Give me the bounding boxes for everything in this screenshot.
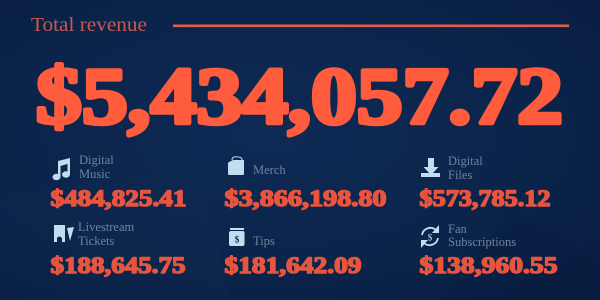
panel: tips — [224, 228, 362, 278]
label: fan subscriptions: Subscriptions — [448, 235, 516, 249]
label: digital files: Files — [448, 168, 472, 182]
icon: tip jar: $ — [235, 234, 240, 244]
value: merch: $3,866,198.80 — [224, 186, 386, 211]
value: fan subscriptions: $138,960.55 — [420, 253, 558, 278]
label: digital files: Digital — [448, 154, 483, 168]
icon: shopping bag — [228, 157, 244, 175]
label: fan subscriptions: Fan — [448, 222, 467, 236]
icon: tickets — [54, 225, 74, 242]
value: digital music: $484,825.41 — [50, 186, 186, 211]
panel: livestream tickets — [50, 220, 186, 278]
heading rule — [173, 24, 569, 27]
panel: fan subscriptions — [420, 222, 558, 278]
icon: circular arrows with dollar: $ — [428, 232, 433, 242]
label: livestream tickets: Livestream — [78, 220, 134, 234]
value: digital files: $573,785.12 — [420, 186, 550, 211]
label: digital music: Digital — [79, 153, 114, 167]
value: tips: $181,642.09 — [224, 253, 362, 278]
panel: merch — [224, 157, 386, 211]
icon: music notes — [53, 158, 70, 180]
heading: total revenue: Total revenue — [31, 14, 147, 36]
total amount: $5,434,057.72 — [36, 53, 563, 141]
panel: digital files — [420, 154, 550, 211]
label: digital music: Music — [79, 167, 111, 181]
panel: digital music — [50, 153, 186, 211]
value: livestream tickets: $188,645.75 — [50, 253, 186, 278]
label: tips: Tips — [253, 234, 275, 248]
label: merch: Merch — [253, 163, 286, 177]
label: livestream tickets: Tickets — [78, 234, 114, 248]
icon: download — [421, 158, 440, 177]
